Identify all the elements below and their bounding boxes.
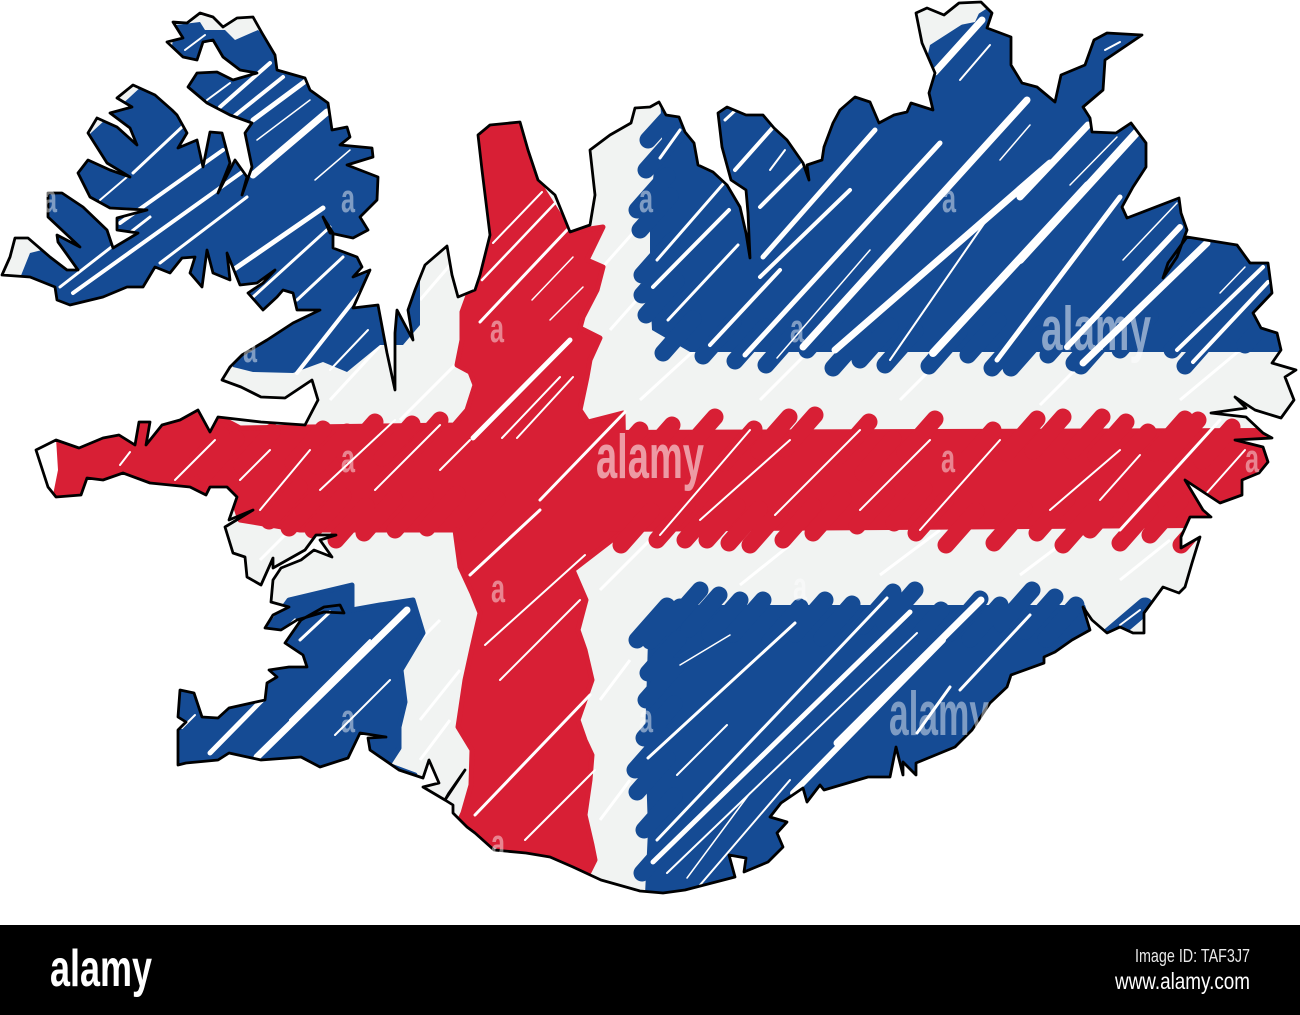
watermark letters: a [941,437,955,481]
footer logo: alamy [50,940,152,998]
watermark letters [43,177,1259,866]
watermark letters: a [639,697,653,741]
watermarks [43,177,1259,866]
watermark: right: alamy [1041,295,1151,364]
watermark: lower right: alamy [889,680,989,749]
watermark: center: alamy [596,423,704,492]
blue region: southwest [170,585,423,775]
watermark letters: a [490,307,504,351]
watermark letters: a [1245,437,1259,481]
watermark letters: a [243,327,257,371]
image id: Image ID: TAF3J7 [1135,946,1250,966]
watermark letters: a [43,177,57,221]
website: www.alamy.com [1114,968,1250,994]
footer bar [0,925,1300,1015]
watermark letters: a [491,567,505,611]
watermark letters: a [639,177,653,221]
watermark letters: a [341,437,355,481]
watermark letters: a [491,822,505,866]
watermark letters: a [793,565,807,609]
blue region: northwest [20,22,420,373]
red cross [30,118,1290,880]
watermark letters: a [942,177,956,221]
watermark letters: a [790,307,804,351]
blue region: southeast [635,590,1145,895]
watermark letters: a [341,697,355,741]
watermark letters: a [341,177,355,221]
blue region: northeast [637,0,1300,368]
